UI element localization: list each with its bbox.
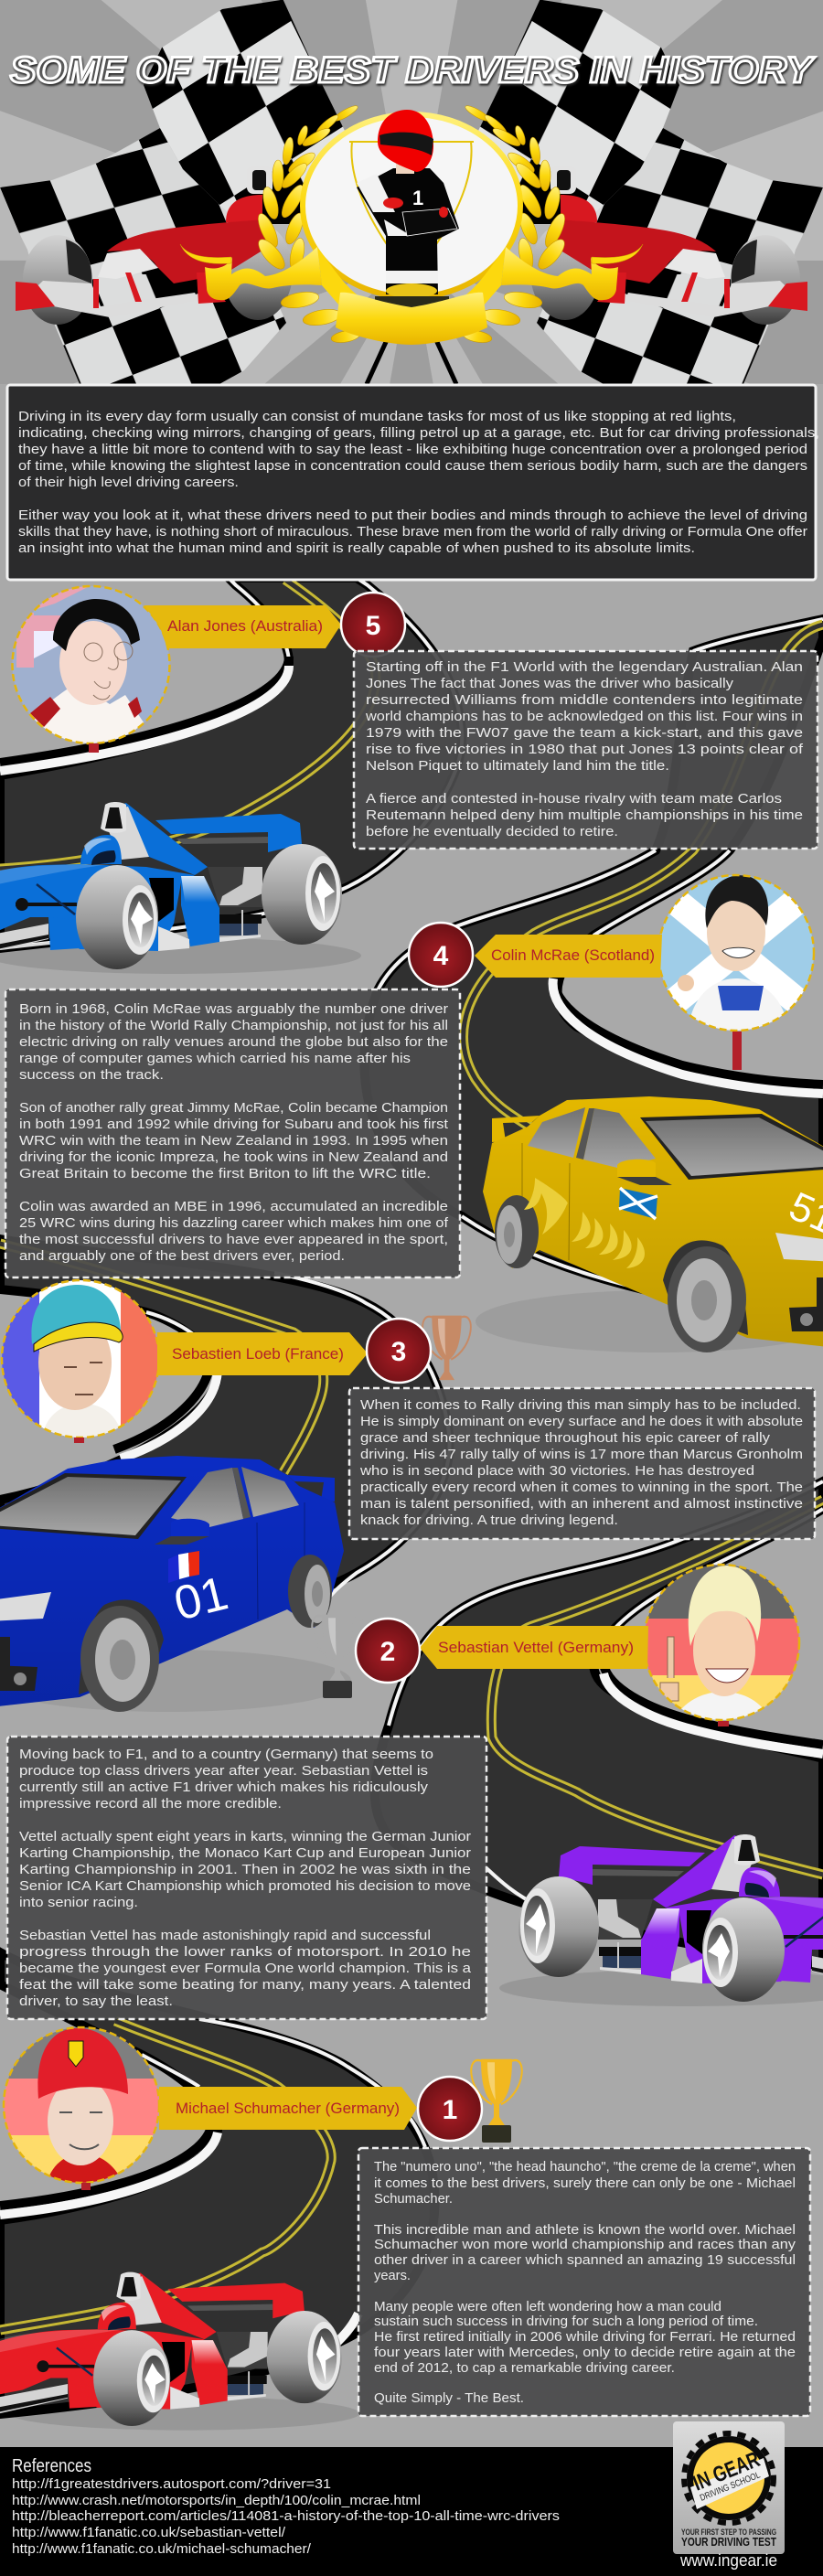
- gold trophy: [471, 2059, 522, 2143]
- rank 3: [367, 1319, 431, 1383]
- intro text: an insight into what the human mind and spirit is really capable of when pushed to its absolute limits.: [18, 540, 695, 556]
- rank 2: 2: [380, 1637, 395, 1667]
- panel: Sebastian Vettel text: feat the will take some beating for many, many years. A talented: [19, 1977, 471, 1993]
- panel: Colin McRae text: Colin was awarded an MBE in 1996, accumulated an incredible: [19, 1199, 448, 1214]
- portrait: Michael Schumacher: [4, 2026, 160, 2190]
- panel: Sebastien Loeb text: who is in second place with 30 victories. He has destroyed: [359, 1463, 754, 1479]
- blue F1 car: [0, 802, 361, 974]
- panel: Alan Jones text: world champions has to be acknowledged on this list. Four wins in: [365, 709, 803, 724]
- panel: Michael Schumacher text: This incredible man and athlete is known the world over. Michael: [374, 2222, 796, 2238]
- references: http://bleacherreport.com/articles/114081-a-history-of-the-top-10-all-time-wrc-drivers: [12, 2508, 560, 2524]
- sunburst background: [0, 0, 823, 384]
- label: Colin McRae: [475, 935, 662, 978]
- panel: Colin McRae text: Son of another rally great Jimmy McRae, Colin became Champion: [19, 1100, 448, 1116]
- panel: Michael Schumacher text: end of 2012, to cap a remarkable driving career.: [374, 2360, 675, 2376]
- red F1 car: [0, 2272, 360, 2431]
- references: http://www.crash.net/motorsports/in_depth/100/colin_mcrae.html: [12, 2493, 421, 2508]
- panel: Michael Schumacher text: Schumacher won more world championship and races than any: [374, 2237, 796, 2252]
- panel: Sebastien Loeb text: [349, 1388, 815, 1539]
- references: [12, 2456, 560, 2557]
- panel: Sebastian Vettel text: became the youngest ever Formula One world champion. This is a: [19, 1961, 472, 1976]
- panel: Alan Jones text: Nelson Piquet to ultimately land him the title.: [366, 758, 669, 774]
- intro text: of time, while knowing the slightest lapse in concentration could cause them serious bodily harm, such are the dangers: [18, 458, 807, 474]
- panel: Sebastien Loeb text: man is talent personified, with an inherent and almost instinctive: [360, 1496, 803, 1512]
- panel: Sebastian Vettel text: produce top class drivers year after year. Sebastian Vettel is: [19, 1763, 428, 1779]
- panel: Michael Schumacher text: The "numero uno", "the head hauncho", "the creme de la creme", when: [374, 2159, 796, 2175]
- road: Michael Schumacher section: [0, 1952, 434, 2414]
- panel: Alan Jones text: Jones The fact that Jones was the driver who basically: [366, 676, 734, 691]
- left red F1 car: [16, 166, 293, 325]
- panel: Alan Jones text: [354, 651, 818, 849]
- rank 1: [418, 2077, 482, 2141]
- rank 5: [341, 593, 405, 657]
- intro text: they have a little bit more to contend with to say the least - like exhibiting huge concentration over a prolonged period: [18, 442, 807, 457]
- panel: Sebastian Vettel text: Vettel actually spent eight years in karts, winning the German Junior: [19, 1829, 471, 1844]
- panel: Alan Jones text: 1979 with the FW07 gave the team a kick-start, and this gave: [366, 725, 803, 741]
- panel: Michael Schumacher text: sustain such success in driving for such a long period of time.: [374, 2314, 758, 2329]
- rank 5: 5: [366, 611, 380, 641]
- panel: Michael Schumacher text: [358, 2148, 810, 2416]
- references: References: [12, 2456, 91, 2476]
- panel: Sebastien Loeb text: grace and sheer technique throughout his epic career of rally: [360, 1430, 771, 1446]
- label: Alan Jones: [144, 605, 341, 648]
- portrait: Sebastian Vettel: [644, 1564, 800, 1726]
- panel: Sebastien Loeb text: He is simply dominant on every surface and he does it with absolute: [360, 1414, 803, 1429]
- intro text: indicating, checking wing mirrors, changing of gears, filling petrol up at a garage, etc. But for car driving professionals,: [18, 425, 819, 441]
- label: Michael Schumacher: Michael Schumacher (Germany): [176, 2100, 400, 2117]
- label: Sebastien Loeb: [157, 1332, 368, 1375]
- label: Colin McRae: Colin McRae (Scotland): [491, 946, 655, 964]
- rank 3: 3: [391, 1337, 406, 1367]
- rank 2: [356, 1619, 420, 1683]
- panel: Colin McRae text: success on the track.: [19, 1067, 164, 1083]
- panel: Sebastian Vettel text: progress through the lower ranks of motorsport. In 2010 he: [19, 1944, 471, 1960]
- laurel right: [462, 103, 569, 345]
- road: Sebastian Vettel section: [375, 1481, 823, 1966]
- panel: Colin McRae text: in the history of the World Rally Championship, not just for his all: [19, 1018, 448, 1033]
- label: Michael Schumacher: [159, 2087, 417, 2130]
- panel: Sebastian Vettel text: Karting Championship, the Monaco Kart Cup and European Junior: [19, 1845, 471, 1861]
- label: Sebastian Vettel: Sebastian Vettel (Germany): [438, 1639, 634, 1656]
- logo: In Gear Driving School: YOUR DRIVING TEST: [681, 2535, 776, 2549]
- panel: Colin McRae text: Great Britain to become the first Briton to lift the WRC title.: [19, 1166, 431, 1181]
- header: [0, 0, 823, 384]
- gear: DRIVING SCHOOL: [699, 2470, 762, 2504]
- references: http://www.f1fanatic.co.uk/sebastian-vettel/: [12, 2525, 286, 2540]
- ribbon left: [179, 244, 357, 305]
- label: Sebastien Loeb: Sebastien Loeb (France): [172, 1345, 344, 1363]
- panel: Colin McRae text: the most successful drivers to have ever appeared in the sport,: [19, 1232, 448, 1247]
- gold banner: [336, 293, 487, 345]
- panel: Colin McRae text: [5, 989, 460, 1277]
- road: Colin McRae section: [364, 619, 823, 1317]
- panel: Colin McRae text: 25 WRC wins during his dazzling career which makes him one of: [19, 1215, 449, 1231]
- panel: Colin McRae text: and arguably one of the best drivers ever, period.: [19, 1248, 345, 1264]
- panel: Colin McRae text: range of computer games which carried his name after his: [19, 1051, 411, 1066]
- panel: Sebastien Loeb text: When it comes to Rally driving this man simply has to be included.: [360, 1397, 801, 1413]
- car number: 01: [169, 1566, 233, 1631]
- references: http://f1greatestdrivers.autosport.com/?driver=31: [12, 2476, 331, 2492]
- road: Sebastien Loeb section: [0, 1239, 450, 1646]
- panel: Michael Schumacher text: He first retired initially in 2006 while driving for Ferrari. He returned: [374, 2329, 796, 2345]
- emblem: [180, 103, 643, 345]
- panel: Sebastian Vettel text: driver, to say the least.: [19, 1993, 173, 2009]
- rank 4: [409, 923, 473, 987]
- gear: [684, 2433, 774, 2523]
- panel: Colin McRae text: electric driving on rally venues around the globe but also for the: [19, 1034, 448, 1050]
- blue rally car: [0, 1456, 351, 1712]
- title: SOME OF THE BEST DRIVERS IN HISTORY: [10, 50, 816, 91]
- portrait: Alan Jones: [12, 585, 172, 753]
- panel: introduction: [7, 385, 819, 580]
- laurel left: [254, 103, 361, 345]
- flag poles: [281, 0, 542, 384]
- panel: Alan Jones text: A fierce and contested in-house rivalry with team mate Carlos: [366, 791, 782, 807]
- panel: Sebastien Loeb text: knack for driving. A true driving legend.: [360, 1512, 618, 1528]
- rank 1: 1: [443, 2095, 457, 2125]
- portrait: Sebastien Loeb: [2, 1280, 161, 1443]
- road: Alan Jones section: [0, 578, 462, 948]
- logo: In Gear Driving School: YOUR FIRST STEP TO PASSING: [681, 2528, 776, 2537]
- label: Alan Jones: Alan Jones (Australia): [167, 617, 323, 635]
- panel: Alan Jones text: Starting off in the F1 World with the legendary Australian. Alan: [366, 659, 803, 675]
- footer: [0, 2421, 823, 2576]
- logo: In Gear Driving School: [673, 2421, 785, 2554]
- intro text: skills that they have, is nothing short of miraculous. These brave men from the world of rally driving or Formula One offer: [18, 524, 807, 540]
- rank 4: 4: [433, 941, 449, 971]
- panel: Sebastian Vettel text: Senior ICA Kart Championship which promoted his decision to move: [19, 1878, 471, 1894]
- panel: Michael Schumacher text: other driver in a career which spanned an amazing 19 successful: [374, 2252, 796, 2268]
- panel: Colin McRae text: in both 1991 and 1992 while driving for Subaru and took his first: [19, 1117, 449, 1132]
- panel: Alan Jones text: before he eventually decided to retire.: [366, 824, 618, 839]
- door flame decals: [524, 1178, 645, 1268]
- panel: Sebastian Vettel text: Karting Championship in 2001. Then in 2002 he was sixth in the: [19, 1862, 471, 1877]
- helmet: [378, 110, 433, 172]
- panel: Sebastien Loeb text: practically every record when it comes to winning in the sport. The: [360, 1480, 803, 1495]
- intro text: [18, 409, 819, 556]
- label: Sebastian Vettel: [420, 1626, 648, 1669]
- panel: Alan Jones text: Reutemann helped deny him multiple championships in his time: [366, 807, 803, 823]
- references: http://www.f1fanatic.co.uk/michael-schumacher/: [12, 2541, 312, 2557]
- yellow rally car: [476, 1096, 823, 1352]
- panel: Sebastian Vettel text: Moving back to F1, and to a country (Germany) that seems to: [19, 1747, 433, 1762]
- website: www.ingear.ie: [679, 2551, 777, 2570]
- panel: Sebastian Vettel text: into senior racing.: [19, 1895, 138, 1910]
- gear: IN GEAR: [689, 2447, 764, 2496]
- podium base: [375, 283, 449, 309]
- intro text: Either way you look at it, what these drivers need to put their bodies and minds through to achieve the level of driving: [18, 508, 807, 523]
- panel: Michael Schumacher text: it comes to the best drivers, surely there can only be one - Michael: [374, 2175, 796, 2191]
- intro text: Driving in its every day form usually can consist of mundane tasks for most of us like stopping at red lights,: [18, 409, 736, 424]
- panel: Sebastien Loeb text: driving. His 47 rally tally of wins is 17 more than Marcus Gronholm: [360, 1447, 803, 1462]
- intro text: of their high level driving careers.: [18, 475, 239, 490]
- panel: Colin McRae text: driving for the iconic Impreza, he took wins in New Zealand and: [19, 1149, 448, 1165]
- left chequered flag: [0, 0, 345, 384]
- portrait: Colin McRae: [658, 875, 814, 1070]
- silver trophy: [312, 1615, 363, 1698]
- trophy outline: [349, 142, 474, 256]
- panel: Alan Jones text: resurrected Williams from middle contenders into legitimate: [366, 692, 803, 708]
- panel: Colin McRae text: WRC win with the team in New Zealand in 1993. In 1995 when: [19, 1133, 448, 1149]
- driver figure: [357, 110, 459, 294]
- Scottish flag decal: [619, 1188, 657, 1219]
- panel: Sebastian Vettel text: impressive record all the more credible.: [19, 1796, 282, 1812]
- panel: Colin McRae text: Born in 1968, Colin McRae was arguably the number one driver: [19, 1001, 448, 1017]
- gold oval frame: [303, 114, 520, 297]
- right chequered flag: [478, 0, 823, 384]
- panel: Michael Schumacher text: years.: [374, 2268, 411, 2283]
- driver figure: 1: [412, 187, 423, 209]
- purple F1 car: [499, 1834, 823, 2006]
- ribbon right: [466, 244, 644, 305]
- French flag decal: [168, 1551, 199, 1583]
- panel: Michael Schumacher text: Quite Simply - The Best.: [374, 2390, 524, 2406]
- panel: Sebastian Vettel text: currently still an active F1 driver which makes his ridiculously: [19, 1780, 429, 1795]
- panel: Michael Schumacher text: Schumacher.: [374, 2191, 453, 2207]
- panel: Sebastian Vettel text: Sebastian Vettel has made astonishingly rapid and successful: [19, 1928, 431, 1943]
- panel: Alan Jones text: rise to five victories in 1980 that put Jones 13 points clear of: [366, 742, 804, 757]
- panel: Sebastian Vettel text: [7, 1737, 486, 2019]
- panel: Michael Schumacher text: Many people were often left wondering how a man could: [374, 2299, 721, 2314]
- right red F1 car: [530, 166, 807, 325]
- panel: Michael Schumacher text: four years later with Mercedes, only to decide retire again at the: [374, 2345, 796, 2360]
- bronze trophy: [422, 1316, 471, 1380]
